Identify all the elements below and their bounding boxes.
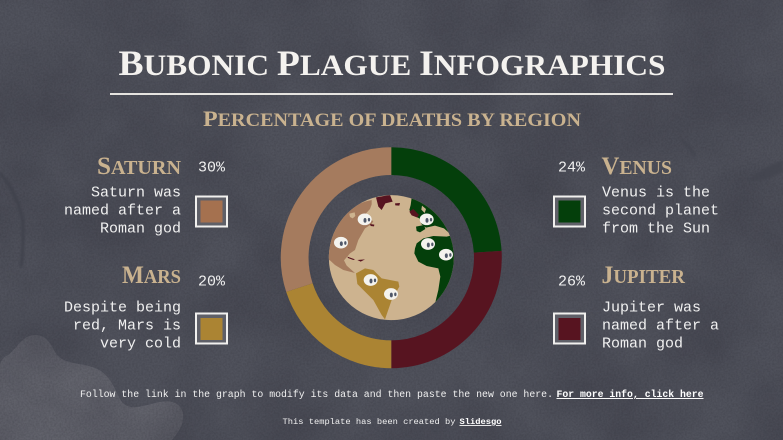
panel: Jupiter [554,262,719,352]
Saturn description: named after a [64,202,181,220]
Venus description: Venus is the [602,184,710,202]
panel: Venus [554,153,719,238]
Mars heading: MARS [122,262,181,289]
subtitle: PERCENTAGE OF DEATHS BY REGION [203,106,582,131]
Europe [409,198,448,232]
footer note: Follow the link in the graph to modify its data and then paste the new one here. [80,389,553,400]
globe illustration [325,195,463,320]
North America [325,200,373,273]
Saturn heading: SATURN [97,153,182,180]
Africa [414,236,454,302]
South America [356,268,399,319]
Jupiter description: Roman god [602,336,683,352]
Venus description: from the Sun [602,220,710,238]
title: BUBONIC PLAGUE INFOGRAPHICS [118,43,666,83]
Venus heading: VENUS [602,153,672,180]
Jupiter swatch [554,314,585,344]
segment: Venus 24% [391,161,488,252]
Jupiter description: Jupiter was [602,300,701,316]
Mars swatch [196,314,227,344]
template credit: Slidesgo [460,417,502,427]
Saturn percentage: 30% [198,160,226,176]
donut chart [295,161,488,354]
Jupiter heading: JUPITER [602,262,686,289]
segment: Jupiter 26% [391,252,488,354]
Venus swatch [554,196,585,226]
Mars description: Despite being [64,300,181,316]
panel: Saturn [64,153,227,238]
panel: Mars [64,262,227,352]
Mars description: red, Mars is [73,318,181,334]
segment: Mars 20% [299,288,391,354]
segment: Saturn 30% [295,161,391,288]
template credit: This template has been created by [282,417,456,427]
skull markers [334,213,453,300]
Greenland, Iceland, UK and Caribbean [347,195,419,262]
Saturn swatch [196,196,227,226]
Venus description: second planet [602,202,719,220]
title divider [110,93,673,95]
Saturn description: Saturn was [91,184,181,202]
Scandinavia gap [421,206,426,213]
Jupiter percentage: 26% [558,274,586,290]
footer note: For more info, click here [556,389,704,400]
Mars percentage: 20% [198,274,226,290]
Mars description: very cold [100,336,181,352]
Saturn description: Roman god [100,220,181,238]
Iberia [416,225,425,232]
Venus percentage: 24% [558,160,586,176]
Jupiter description: named after a [602,318,719,334]
